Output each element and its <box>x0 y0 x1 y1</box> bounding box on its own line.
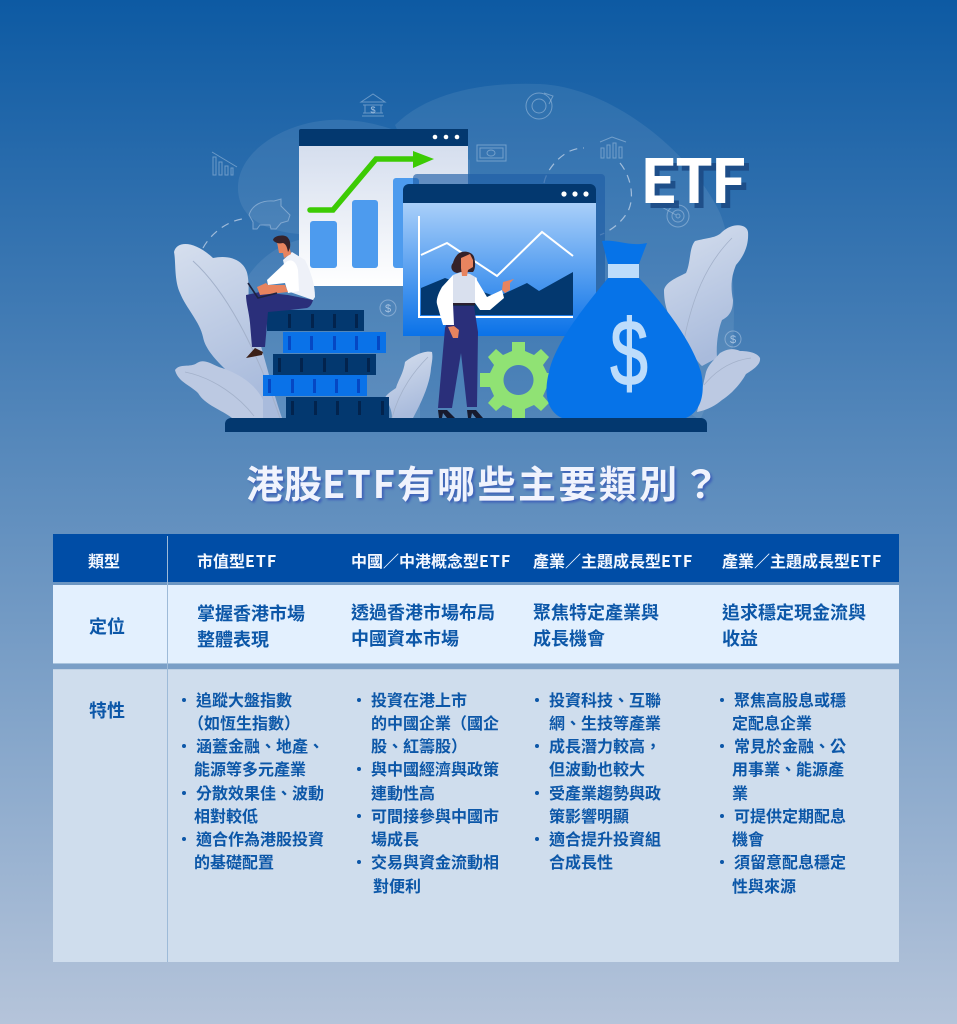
title: 港股ETF有哪些主要類別？ <box>246 454 722 509</box>
dashed arc right <box>544 148 631 235</box>
characteristics: column 3: 投資科技、互聯 <box>549 686 661 710</box>
characteristics: column 4: 機會 <box>732 826 764 850</box>
characteristics: column 1: 追蹤大盤指數 <box>196 686 292 710</box>
dashed arc left <box>203 219 242 248</box>
chart window: line chart <box>403 174 605 336</box>
characteristics: column 4: 須留意配息穩定 <box>734 849 846 873</box>
positioning: column 4 <box>722 599 866 651</box>
characteristics: column 4: 業 <box>732 780 748 804</box>
icon: bank: $ <box>370 105 376 115</box>
positioning row <box>53 585 899 664</box>
characteristics: column 3: 策影響明顯 <box>549 803 629 827</box>
characteristics: column 2: 對便利 <box>373 872 421 896</box>
positioning: column 2 <box>351 599 495 651</box>
characteristics: column 4: 聚焦高股息或穩 <box>734 686 846 710</box>
table <box>53 534 899 962</box>
row label: characteristics: 特性 <box>89 697 125 723</box>
icon: coin dollar right: $ <box>730 334 736 346</box>
leaf: left large <box>174 244 282 418</box>
icon: banknote <box>477 145 506 161</box>
header: column 1: 市值型ETF <box>197 548 277 572</box>
illustration: ETF investing scene <box>174 84 760 432</box>
chart window: bar chart <box>299 129 468 286</box>
positioning: column 3: 聚焦特定產業與 <box>533 599 659 625</box>
characteristics: column 1: （如恆生指數） <box>188 710 300 734</box>
characteristics: column 1: 相對較低 <box>194 803 258 827</box>
characteristics: column 4: 定配息企業 <box>732 710 812 734</box>
ETF label: ETF <box>640 132 745 221</box>
icon: money bag: $ <box>610 301 648 406</box>
leaf: center small <box>385 352 432 418</box>
positioning: column 3 <box>533 599 659 651</box>
header: column 3: 產業／主題成長型ETF <box>533 548 693 572</box>
characteristics: column 4: 常見於金融、公 <box>734 733 846 757</box>
background blobs <box>238 84 734 420</box>
row label: positioning: 定位 <box>89 613 125 639</box>
positioning: column 4: 追求穩定現金流與 <box>722 599 866 625</box>
icon: money bag <box>547 241 703 418</box>
icon: target <box>660 205 689 227</box>
characteristics: column 2: 股、紅籌股） <box>371 733 467 757</box>
leaf: left low <box>175 361 263 418</box>
characteristics: column 2: 連動性高 <box>371 780 435 804</box>
characteristics: column 3: 網、生技等產業 <box>549 710 661 734</box>
characteristics: column 1: 分散效果佳、波動 <box>196 780 324 804</box>
characteristics: column 2 <box>357 686 499 896</box>
icon: donut chart <box>526 93 553 119</box>
leaf: right large <box>664 225 748 366</box>
characteristics: column 2: 場成長 <box>371 826 419 850</box>
characteristics: column 4: 可提供定期配息 <box>734 803 846 827</box>
figure: woman presenting <box>437 252 514 418</box>
characteristics: column 3: 但波動也較大 <box>549 756 645 780</box>
leaf: right low <box>697 349 760 412</box>
coin stack <box>263 310 389 418</box>
icon: piggy bank <box>249 199 290 229</box>
icon: rising bars <box>600 137 626 158</box>
characteristics: column 3: 適合提升投資組 <box>549 826 661 850</box>
characteristics: column 3: 成長潛力較高， <box>549 733 661 757</box>
positioning: column 1 <box>197 600 305 652</box>
figure: man with laptop <box>246 236 315 358</box>
characteristics: column 1: 能源等多元產業 <box>194 756 306 780</box>
characteristics: column 1: 涵蓋金融、地產、 <box>196 733 324 757</box>
header: column 2: 中國／中港概念型ETF <box>351 548 511 572</box>
icon: coin dollar right <box>725 331 741 347</box>
characteristics: column 3: 受產業趨勢與政 <box>549 780 661 804</box>
ETF label: ETF <box>645 137 750 226</box>
characteristics: column 2: 交易與資金流動相 <box>371 849 499 873</box>
characteristics: column 3: 合成長性 <box>549 849 613 873</box>
characteristics: column 1 <box>182 686 324 873</box>
characteristics: column 4: 用事業、能源產 <box>732 756 844 780</box>
icon: coin dollar left <box>380 300 396 316</box>
characteristics: column 4 <box>720 686 846 896</box>
characteristics: column 3 <box>535 686 661 873</box>
icon: falling bars <box>212 152 237 175</box>
characteristics: column 2: 的中國企業（國企 <box>371 710 499 734</box>
characteristics: column 1: 適合作為港股投資 <box>196 826 324 850</box>
header: column 4: 產業／主題成長型ETF <box>722 548 882 572</box>
first column divider <box>167 536 168 962</box>
positioning: column 3: 成長機會 <box>533 625 605 651</box>
positioning: column 1: 整體表現 <box>197 626 269 652</box>
header row <box>53 534 899 582</box>
characteristics: column 2: 可間接參與中國市 <box>371 803 499 827</box>
positioning: column 1: 掌握香港市場 <box>197 600 305 626</box>
positioning: column 4: 收益 <box>722 625 758 651</box>
positioning: column 2: 中國資本市場 <box>351 625 459 651</box>
characteristics: column 2: 與中國經濟與政策 <box>371 756 499 780</box>
icon: coin dollar left: $ <box>385 303 391 315</box>
icon: gear <box>480 342 556 418</box>
characteristics: column 4: 性與來源 <box>732 872 796 896</box>
icon: bank <box>361 94 385 116</box>
characteristics: column 2: 投資在港上市 <box>371 686 467 710</box>
arrow: green rising <box>310 151 434 210</box>
characteristics row <box>53 669 899 962</box>
characteristics: column 1: 的基礎配置 <box>194 849 274 873</box>
positioning: column 2: 透過香港市場布局 <box>351 599 495 625</box>
ground base <box>225 418 707 432</box>
header: type: 類型 <box>88 548 120 572</box>
